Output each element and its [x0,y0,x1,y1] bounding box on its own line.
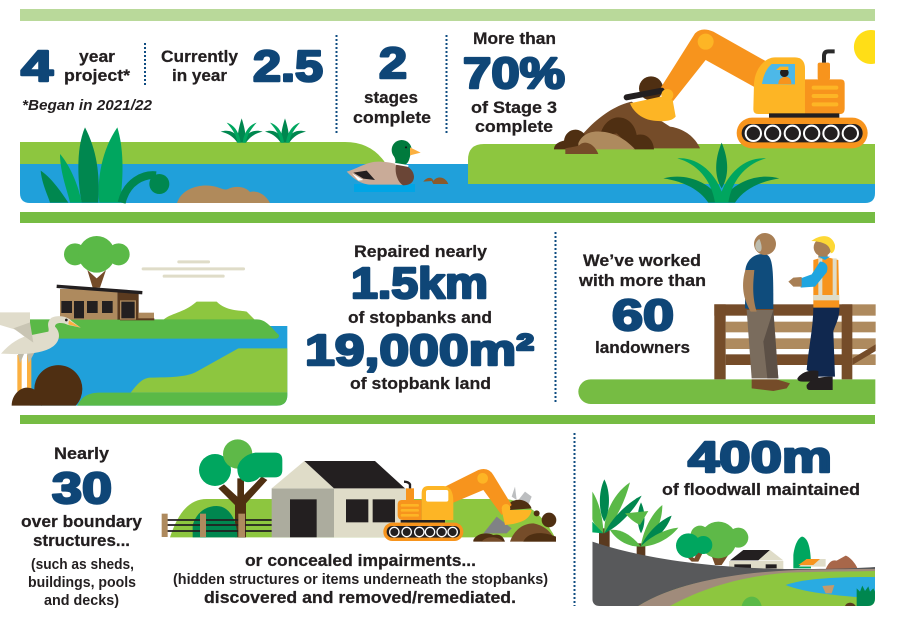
number 70%: 70% [463,49,565,98]
label: with more than [578,271,706,290]
icon: reeds and fern [41,127,169,203]
right bank [468,144,875,184]
label: More than [473,29,556,48]
property scene with excavator [162,439,556,542]
label: of Stage 3 [471,98,557,117]
note: buildings, pools [28,574,136,591]
label: We’ve worked [583,251,701,270]
icon: dirt pile [554,76,700,154]
icon: tree [193,439,282,537]
label: of stopbank land [350,374,491,393]
icon: dirt mound [12,365,82,406]
far hill [131,348,287,393]
icon: duck [347,140,448,192]
caption: concealed impairments [173,551,548,607]
note: and decks) [44,592,119,609]
icon: tree [64,236,130,288]
note: (such as sheds, [31,556,134,573]
middle band [20,212,875,223]
fence [714,304,876,379]
label: year [79,47,115,66]
label: structures... [33,531,130,550]
lake [786,577,875,598]
number 19,000m2: 19,000m² [305,326,534,375]
label: complete [475,117,553,136]
stat: stopbanks repaired [305,242,534,393]
left bank [20,142,386,164]
back hill [163,302,255,320]
green bank [638,570,875,606]
icon: foreground plant [663,143,779,203]
footnote: *Began in 2021/22 [22,97,153,114]
number 2: 2 [379,39,407,88]
icon: excavator [627,30,868,148]
floodwall scene [592,479,875,606]
stat: 400m of floodwall [662,433,860,499]
landowner scene [578,233,876,404]
fence [162,514,283,537]
label: in year [172,66,227,85]
stat: 70 percent of stage 3 [463,29,565,136]
icon: houses [729,537,858,569]
icon: trees [676,522,748,565]
shore [77,393,287,406]
label: stages [364,88,418,107]
lake [30,326,287,406]
icon: heron [0,312,81,392]
stat: 60 landowners [578,251,706,357]
top band [20,9,875,21]
label: Currently [161,47,239,66]
hill [170,499,555,537]
label: or concealed impairments... [245,551,476,570]
number 1.5km: 1.5km [351,259,488,308]
icon: worker in hi-vis [788,236,839,390]
near bank [30,319,279,339]
label: Nearly [54,444,110,463]
rocks [177,186,270,203]
label: complete [353,108,431,127]
clouds [142,260,245,278]
ground [578,379,875,404]
lake scene with house and heron [0,236,287,406]
number 30: 30 [52,464,112,513]
floodwall [592,542,875,606]
icon: landowner [743,233,790,391]
river scene [20,30,875,203]
icon: reeds [822,585,834,593]
label: discovered and removed/remediated. [204,588,516,607]
label: of stopbanks and [348,308,492,327]
stat: 2 stages complete [353,39,431,127]
number 400m: 400m [688,433,832,482]
number 2.5: 2.5 [253,42,323,91]
icon: sun [854,30,875,64]
icon: small plants [221,118,306,143]
rock [845,603,856,606]
number 60: 60 [612,291,674,340]
icon: palm trees [592,479,678,557]
icon: excavator and rubble [383,469,556,542]
river [20,164,875,203]
icon: house [57,286,154,320]
bush [742,597,762,606]
lower band [20,415,875,424]
stat: currently in year 2.5 [161,42,323,91]
stat: 30 over boundary structures [21,444,143,609]
icon: plant [857,586,875,606]
label: landowners [595,338,690,357]
note: (hidden structures or items underneath the stopbanks) [173,571,548,588]
number 4: 4 [21,42,54,91]
label: Repaired nearly [354,242,488,261]
path [638,569,875,606]
label: project* [64,66,130,85]
stat: 4 year project [21,42,153,114]
icon: house [272,461,407,537]
label: over boundary [21,512,143,531]
label: of floodwall maintained [662,480,860,499]
